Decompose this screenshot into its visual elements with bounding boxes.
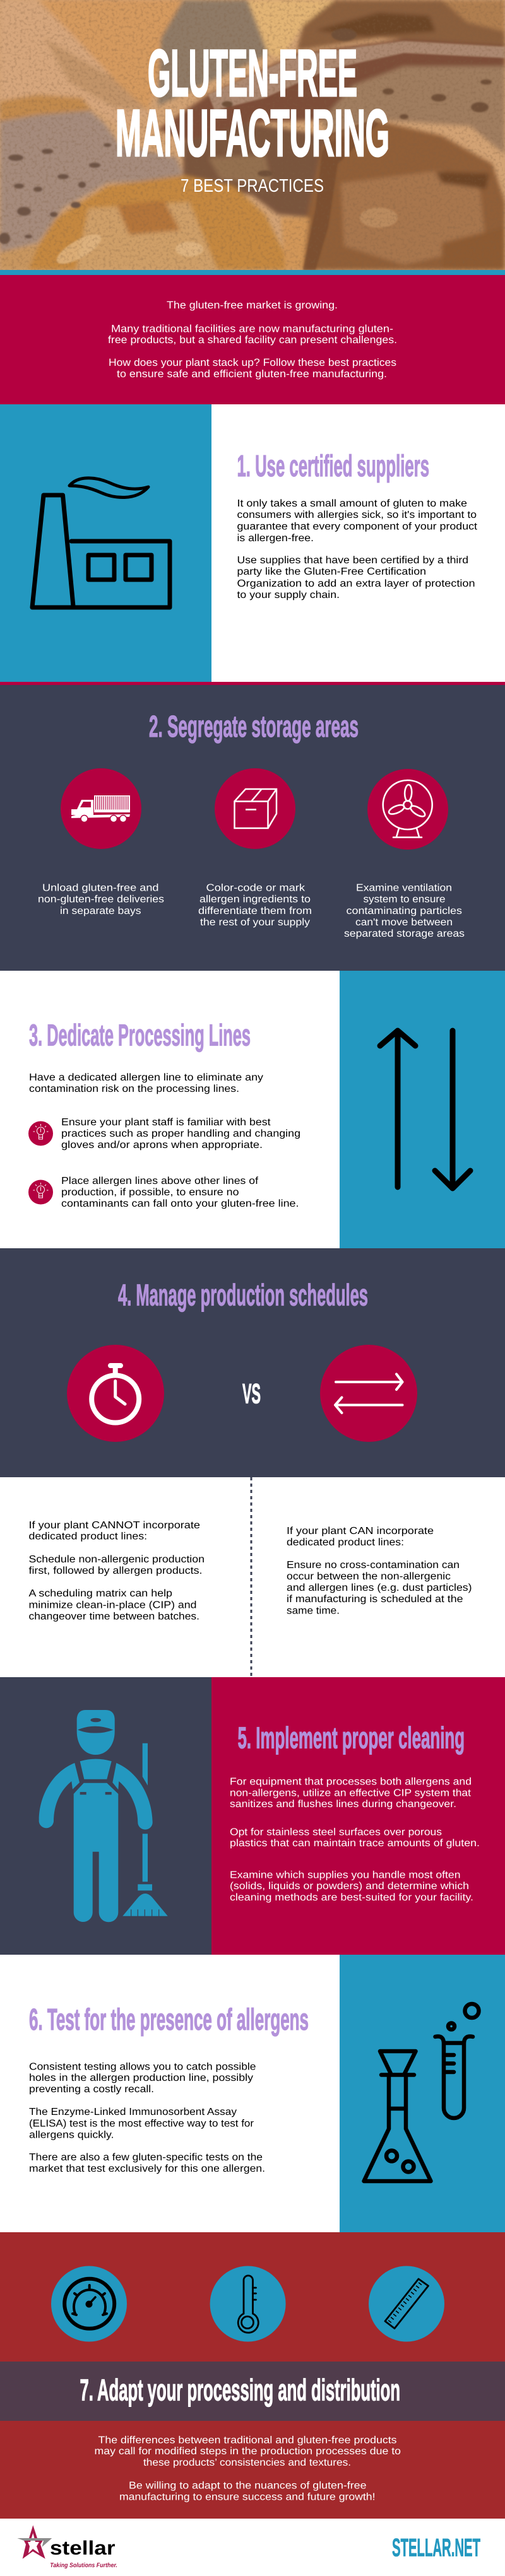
intro text bbox=[29, 1072, 263, 1094]
body text: (solids, liquids or powders) and determine which bbox=[230, 1881, 469, 1892]
text: cannot incorporate: first, followed by allergen products. bbox=[29, 1566, 202, 1576]
subtitle: 7 BEST PRACTICES bbox=[181, 176, 324, 196]
caption: ventilation: can't move between bbox=[355, 917, 453, 928]
intro text: The gluten-free market is growing. bbox=[167, 300, 338, 311]
panel: 5 proper cleaning bbox=[0, 1677, 505, 1955]
icon: down arrow bbox=[435, 1031, 470, 1188]
intro text: How does your plant stack up? Follow these best practices bbox=[109, 357, 396, 368]
text: can incorporate: occur between the non-allergenic bbox=[287, 1571, 451, 1582]
intro text: Have a dedicated allergen line to eliminate any bbox=[29, 1072, 263, 1083]
text: cannot incorporate: minimize clean-in-place (CIP) and bbox=[29, 1600, 197, 1611]
text: can incorporate: dedicated product lines: bbox=[287, 1537, 404, 1548]
panel: 2 storage areas bbox=[0, 682, 505, 971]
body text bbox=[237, 498, 478, 600]
bullet text: staff: Ensure your plant staff is familiar with best bbox=[61, 1117, 271, 1128]
text: cannot incorporate: A scheduling matrix can help bbox=[29, 1588, 172, 1599]
body text: non-allergens, utilize an effective CIP system that bbox=[230, 1788, 472, 1799]
icon: light bulb bbox=[28, 1121, 53, 1145]
body text: For equipment that processes both allergens and bbox=[230, 1776, 472, 1788]
caption: color-code: the rest of your supply bbox=[200, 917, 310, 928]
icon: ventilation fan bbox=[367, 769, 448, 850]
body text bbox=[95, 2435, 401, 2503]
text: can incorporate bbox=[287, 1526, 472, 1616]
body text: sanitizes and flushes lines during changeover. bbox=[230, 1799, 456, 1810]
body text: cleaning methods are best-suited for your facility. bbox=[230, 1892, 473, 1903]
caption: color-code: Color-code or mark bbox=[206, 883, 306, 893]
body text: these products’ consistencies and textures. bbox=[143, 2457, 351, 2468]
icon: opposing arrows bbox=[320, 1345, 417, 1442]
body text: Be willing to adapt to the nuances of gluten-free bbox=[129, 2480, 367, 2491]
body text: guarantee that every component of your product bbox=[237, 521, 478, 532]
icon: cleaner with broom bbox=[39, 1710, 168, 1922]
body text: Examine which supplies you handle most often bbox=[230, 1870, 461, 1881]
body text: There are also a few gluten-specific tests on the bbox=[29, 2152, 263, 2163]
caption: ventilation: Examine ventilation bbox=[356, 883, 452, 893]
icon: ruler bbox=[369, 2266, 444, 2341]
text: can incorporate: Ensure no cross-contamination can bbox=[287, 1560, 460, 1571]
panel: scheduling options bbox=[0, 1477, 505, 1677]
caption: ventilation: separated storage areas bbox=[344, 928, 465, 939]
title bbox=[116, 37, 389, 170]
bullet text: placement: production, if possible, to ensure no bbox=[61, 1187, 239, 1198]
text: cannot incorporate: dedicated product lines: bbox=[29, 1531, 147, 1542]
bullet text: staff bbox=[61, 1117, 300, 1150]
caption: color-code: differentiate them from bbox=[198, 906, 312, 916]
caption: ventilation: system to ensure bbox=[364, 894, 446, 905]
body text: is allergen-free. bbox=[237, 533, 314, 544]
body text: to your supply chain. bbox=[237, 590, 340, 600]
icon: flask bbox=[364, 2051, 431, 2181]
icon: up arrow bbox=[380, 1031, 415, 1187]
body text: It only takes a small amount of gluten to make bbox=[237, 498, 467, 509]
panel: 6 allergen testing bbox=[0, 1955, 505, 2232]
caption: deliveries bbox=[38, 883, 164, 916]
panel: introduction bbox=[0, 270, 505, 404]
bullet text: placement: contaminants can fall onto your gluten-free line. bbox=[61, 1198, 299, 1209]
logo star bbox=[17, 2526, 52, 2559]
icon: test tube bbox=[436, 2004, 478, 2118]
icon: light bulb bbox=[28, 1180, 53, 1205]
body text: The differences between traditional and gluten-free products bbox=[98, 2435, 396, 2446]
bullet text: staff: gloves and/or aprons when appropriate. bbox=[61, 1140, 263, 1150]
intro text: free products, but a shared facility can present challenges. bbox=[108, 334, 397, 346]
caption: deliveries: non-gluten-free deliveries bbox=[38, 894, 164, 905]
icon: truck bbox=[61, 768, 141, 849]
text: can incorporate: and allergen lines (e.g. dust particles) bbox=[287, 1583, 472, 1593]
intro text: Many traditional facilities are now manufacturing gluten- bbox=[111, 323, 393, 334]
caption: color-code: allergen ingredients to bbox=[199, 894, 311, 905]
bread photo background bbox=[0, 0, 505, 270]
bullet text: placement: Place allergen lines above other lines of bbox=[61, 1176, 259, 1186]
body text: market that test exclusively for this one allergen. bbox=[29, 2163, 265, 2174]
intro text bbox=[108, 300, 397, 380]
intro text: contamination risk on the processing lines. bbox=[29, 1084, 239, 1094]
caption: ventilation bbox=[344, 883, 465, 939]
body text: Opt for stainless steel surfaces over porous bbox=[230, 1827, 442, 1838]
body text: manufacturing to ensure success and future growth! bbox=[119, 2491, 375, 2503]
text: cannot incorporate: Schedule non-allergenic production bbox=[29, 1554, 205, 1565]
tagline: Taking Solutions Further. bbox=[50, 2562, 117, 2569]
body text: Use supplies that have been certified by a third bbox=[237, 555, 468, 566]
heading: 3. Dedicate Processing Lines bbox=[29, 1019, 251, 1052]
panel: 4 production schedules bbox=[0, 1248, 505, 1477]
body text: preventing a costly recall. bbox=[29, 2084, 154, 2095]
body text: may call for modified steps in the production processes due to bbox=[95, 2446, 401, 2457]
icon: pressure gauge bbox=[51, 2266, 127, 2341]
body text: consumers with allergies sick, so it's important to bbox=[237, 510, 477, 520]
text: can incorporate: same time. bbox=[287, 1606, 340, 1616]
panel: 1 certified suppliers bbox=[0, 404, 505, 682]
icon: box bbox=[215, 768, 295, 849]
caption: deliveries: Unload gluten-free and bbox=[42, 883, 159, 893]
text: cannot incorporate bbox=[29, 1520, 205, 1622]
panel: hero photo and title bbox=[0, 0, 505, 270]
body text bbox=[230, 1776, 480, 1903]
heading band bbox=[0, 2362, 505, 2421]
text: cannot incorporate: If your plant CANNOT incorporate bbox=[29, 1520, 200, 1531]
caption: deliveries: in separate bays bbox=[60, 906, 141, 916]
bullet text: staff: practices such as proper handling and changing bbox=[61, 1128, 300, 1139]
flour, pores and crust detail bbox=[0, 28, 505, 270]
body text: holes in the allergen production line, possibly bbox=[29, 2073, 253, 2083]
text: cannot incorporate: changeover time between batches. bbox=[29, 1611, 199, 1622]
body text: Consistent testing allows you to catch possible bbox=[29, 2061, 256, 2073]
caption: ventilation: contaminating particles bbox=[346, 906, 462, 916]
text: can incorporate: if manufacturing is scheduled at the bbox=[287, 1594, 463, 1605]
body text: allergens quickly. bbox=[29, 2129, 114, 2141]
logo: stellar bbox=[17, 2526, 117, 2569]
body text: The Enzyme-Linked Immunosorbent Assay bbox=[29, 2107, 237, 2117]
panel: 4 production schedules: VS bbox=[242, 1379, 261, 1409]
bullet text: placement bbox=[61, 1176, 299, 1209]
body text: party like the Gluten-Free Certification bbox=[237, 566, 426, 577]
body text: Organization to add an extra layer of protection bbox=[237, 578, 475, 589]
panel: footer bbox=[0, 2519, 505, 2576]
wordmark: stellar bbox=[50, 2537, 115, 2559]
icon: thermometer bbox=[210, 2266, 286, 2341]
body text bbox=[29, 2061, 265, 2174]
body text: plastics that can maintain trace amounts of gluten. bbox=[230, 1838, 480, 1849]
icon: factory bbox=[32, 478, 170, 607]
panel: 3 processing lines bbox=[0, 971, 505, 1248]
intro text: to ensure safe and efficient gluten-free manufacturing. bbox=[117, 368, 387, 380]
body text: (ELISA) test is the most effective way to test for bbox=[29, 2118, 254, 2129]
icon: stopwatch bbox=[67, 1345, 164, 1442]
caption: color-code bbox=[198, 883, 312, 928]
text: can incorporate: If your plant CAN incorporate bbox=[287, 1526, 434, 1537]
panel: 7 adapt processing bbox=[0, 2232, 505, 2519]
